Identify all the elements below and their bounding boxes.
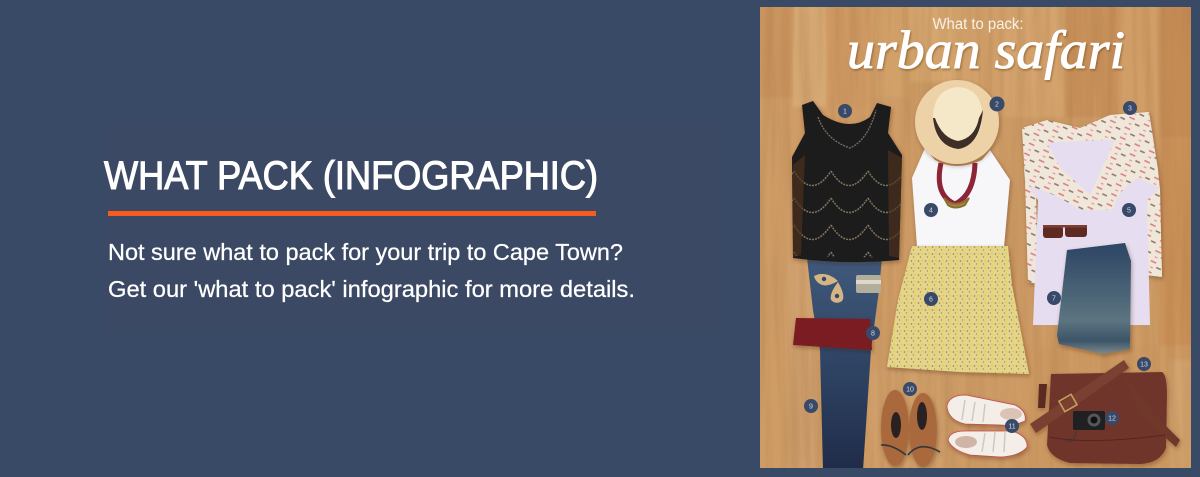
photo title: What to pack:	[932, 16, 1024, 33]
numbered markers: 7	[1052, 296, 1056, 302]
numbered markers: 11	[1008, 424, 1016, 430]
description text: Not sure what to pack for your trip to Cape Town?	[108, 239, 623, 265]
red and gold necklace	[939, 163, 975, 208]
description text: Get our 'what to pack' infographic for more details.	[108, 276, 635, 302]
numbered markers: 3	[1128, 106, 1132, 112]
camera	[1065, 411, 1105, 441]
sunglasses	[1043, 225, 1087, 238]
white tank top	[912, 148, 1010, 247]
leather sandals	[881, 390, 940, 467]
straw hat	[915, 80, 999, 164]
photo title: urban safari	[847, 20, 1125, 80]
numbered markers: 10	[906, 386, 914, 394]
numbered markers: 8	[871, 330, 875, 338]
numbered markers: 13	[1140, 362, 1148, 368]
numbered markers: 12	[1108, 416, 1116, 422]
text panel	[103, 123, 718, 330]
numbered markers	[804, 96, 1151, 433]
cardigan sleeve	[1024, 140, 1158, 210]
infographic photo: urban safari	[750, 0, 1200, 477]
heading: WHAT PACK (INFOGRAPHIC)	[104, 154, 598, 198]
brown leather bag	[1030, 360, 1180, 464]
numbered markers: 5	[1127, 208, 1131, 214]
earrings and cuff	[814, 274, 881, 303]
numbered markers: 2	[995, 102, 999, 108]
cardigan	[1022, 112, 1162, 284]
numbered markers: 9	[809, 404, 813, 410]
description text	[108, 239, 635, 302]
wood floor	[750, 0, 1200, 477]
black beaded top	[792, 101, 902, 262]
jeans	[807, 258, 882, 470]
numbered markers: 6	[929, 296, 933, 304]
red clutch	[793, 318, 872, 350]
numbered markers: 1	[843, 108, 847, 116]
yellow skirt	[887, 246, 1029, 374]
lilac t-shirt	[1028, 140, 1160, 325]
white sneakers	[947, 395, 1027, 457]
heading underline	[108, 211, 596, 216]
numbered markers: 4	[929, 208, 933, 214]
denim shorts	[1057, 243, 1131, 354]
